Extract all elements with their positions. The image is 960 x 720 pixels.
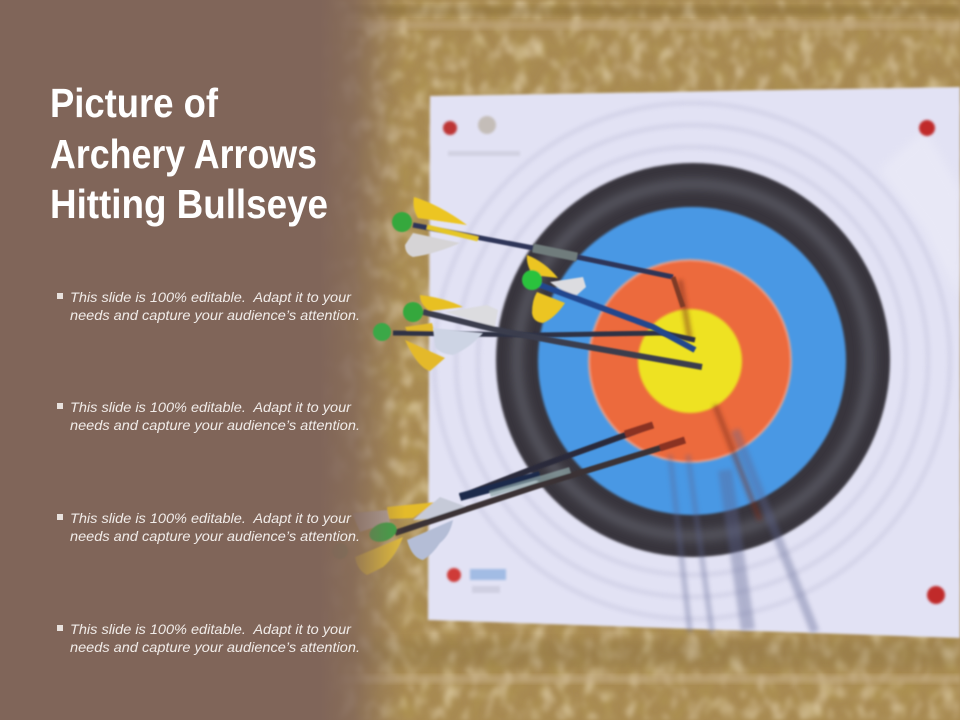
left brown panel bbox=[0, 0, 405, 720]
arrow: third bbox=[403, 295, 702, 367]
title: Picture of bbox=[50, 80, 218, 126]
title bbox=[50, 80, 328, 227]
bullet text block 3: This slide is 100% editable. Adapt it to your bbox=[70, 510, 352, 526]
title: Hitting Bullseye bbox=[50, 181, 328, 227]
arrow: bottom pair bbox=[332, 425, 685, 575]
bullet text block 2 bbox=[57, 399, 360, 433]
black ring bbox=[496, 163, 890, 557]
arrow: fourth, lowest of upper group bbox=[373, 323, 695, 371]
arrow shadows on target bbox=[670, 430, 815, 632]
target paper with printed rings bbox=[428, 87, 960, 638]
red ring bbox=[589, 260, 791, 462]
bullet text block 2: This slide is 100% editable. Adapt it to your bbox=[70, 399, 352, 415]
yellow centre bbox=[638, 309, 742, 413]
bullet text block 2: needs and capture your audience’s attention. bbox=[70, 417, 360, 433]
bullet text block 1: This slide is 100% editable. Adapt it to your bbox=[70, 289, 352, 305]
arrow: top, long bbox=[392, 197, 683, 307]
bullet text block 3: needs and capture your audience’s attention. bbox=[70, 528, 360, 544]
bullet text block 1 bbox=[57, 289, 360, 323]
paper pins and logos bbox=[443, 116, 945, 604]
arrow shadow on red ring bbox=[680, 280, 760, 520]
bullet text block 1: needs and capture your audience’s attention. bbox=[70, 307, 360, 323]
bullet text block 3 bbox=[57, 510, 360, 544]
bullet text block 4: This slide is 100% editable. Adapt it to your bbox=[70, 621, 352, 637]
bullet text block 4 bbox=[57, 621, 360, 655]
title: Archery Arrows bbox=[50, 131, 317, 177]
paper crease highlight bbox=[880, 130, 960, 300]
blue ring bbox=[538, 207, 846, 515]
arrow: second, short bbox=[522, 255, 695, 350]
outer faint rings bbox=[434, 103, 950, 619]
bullet text block 4: needs and capture your audience’s attention. bbox=[70, 639, 360, 655]
